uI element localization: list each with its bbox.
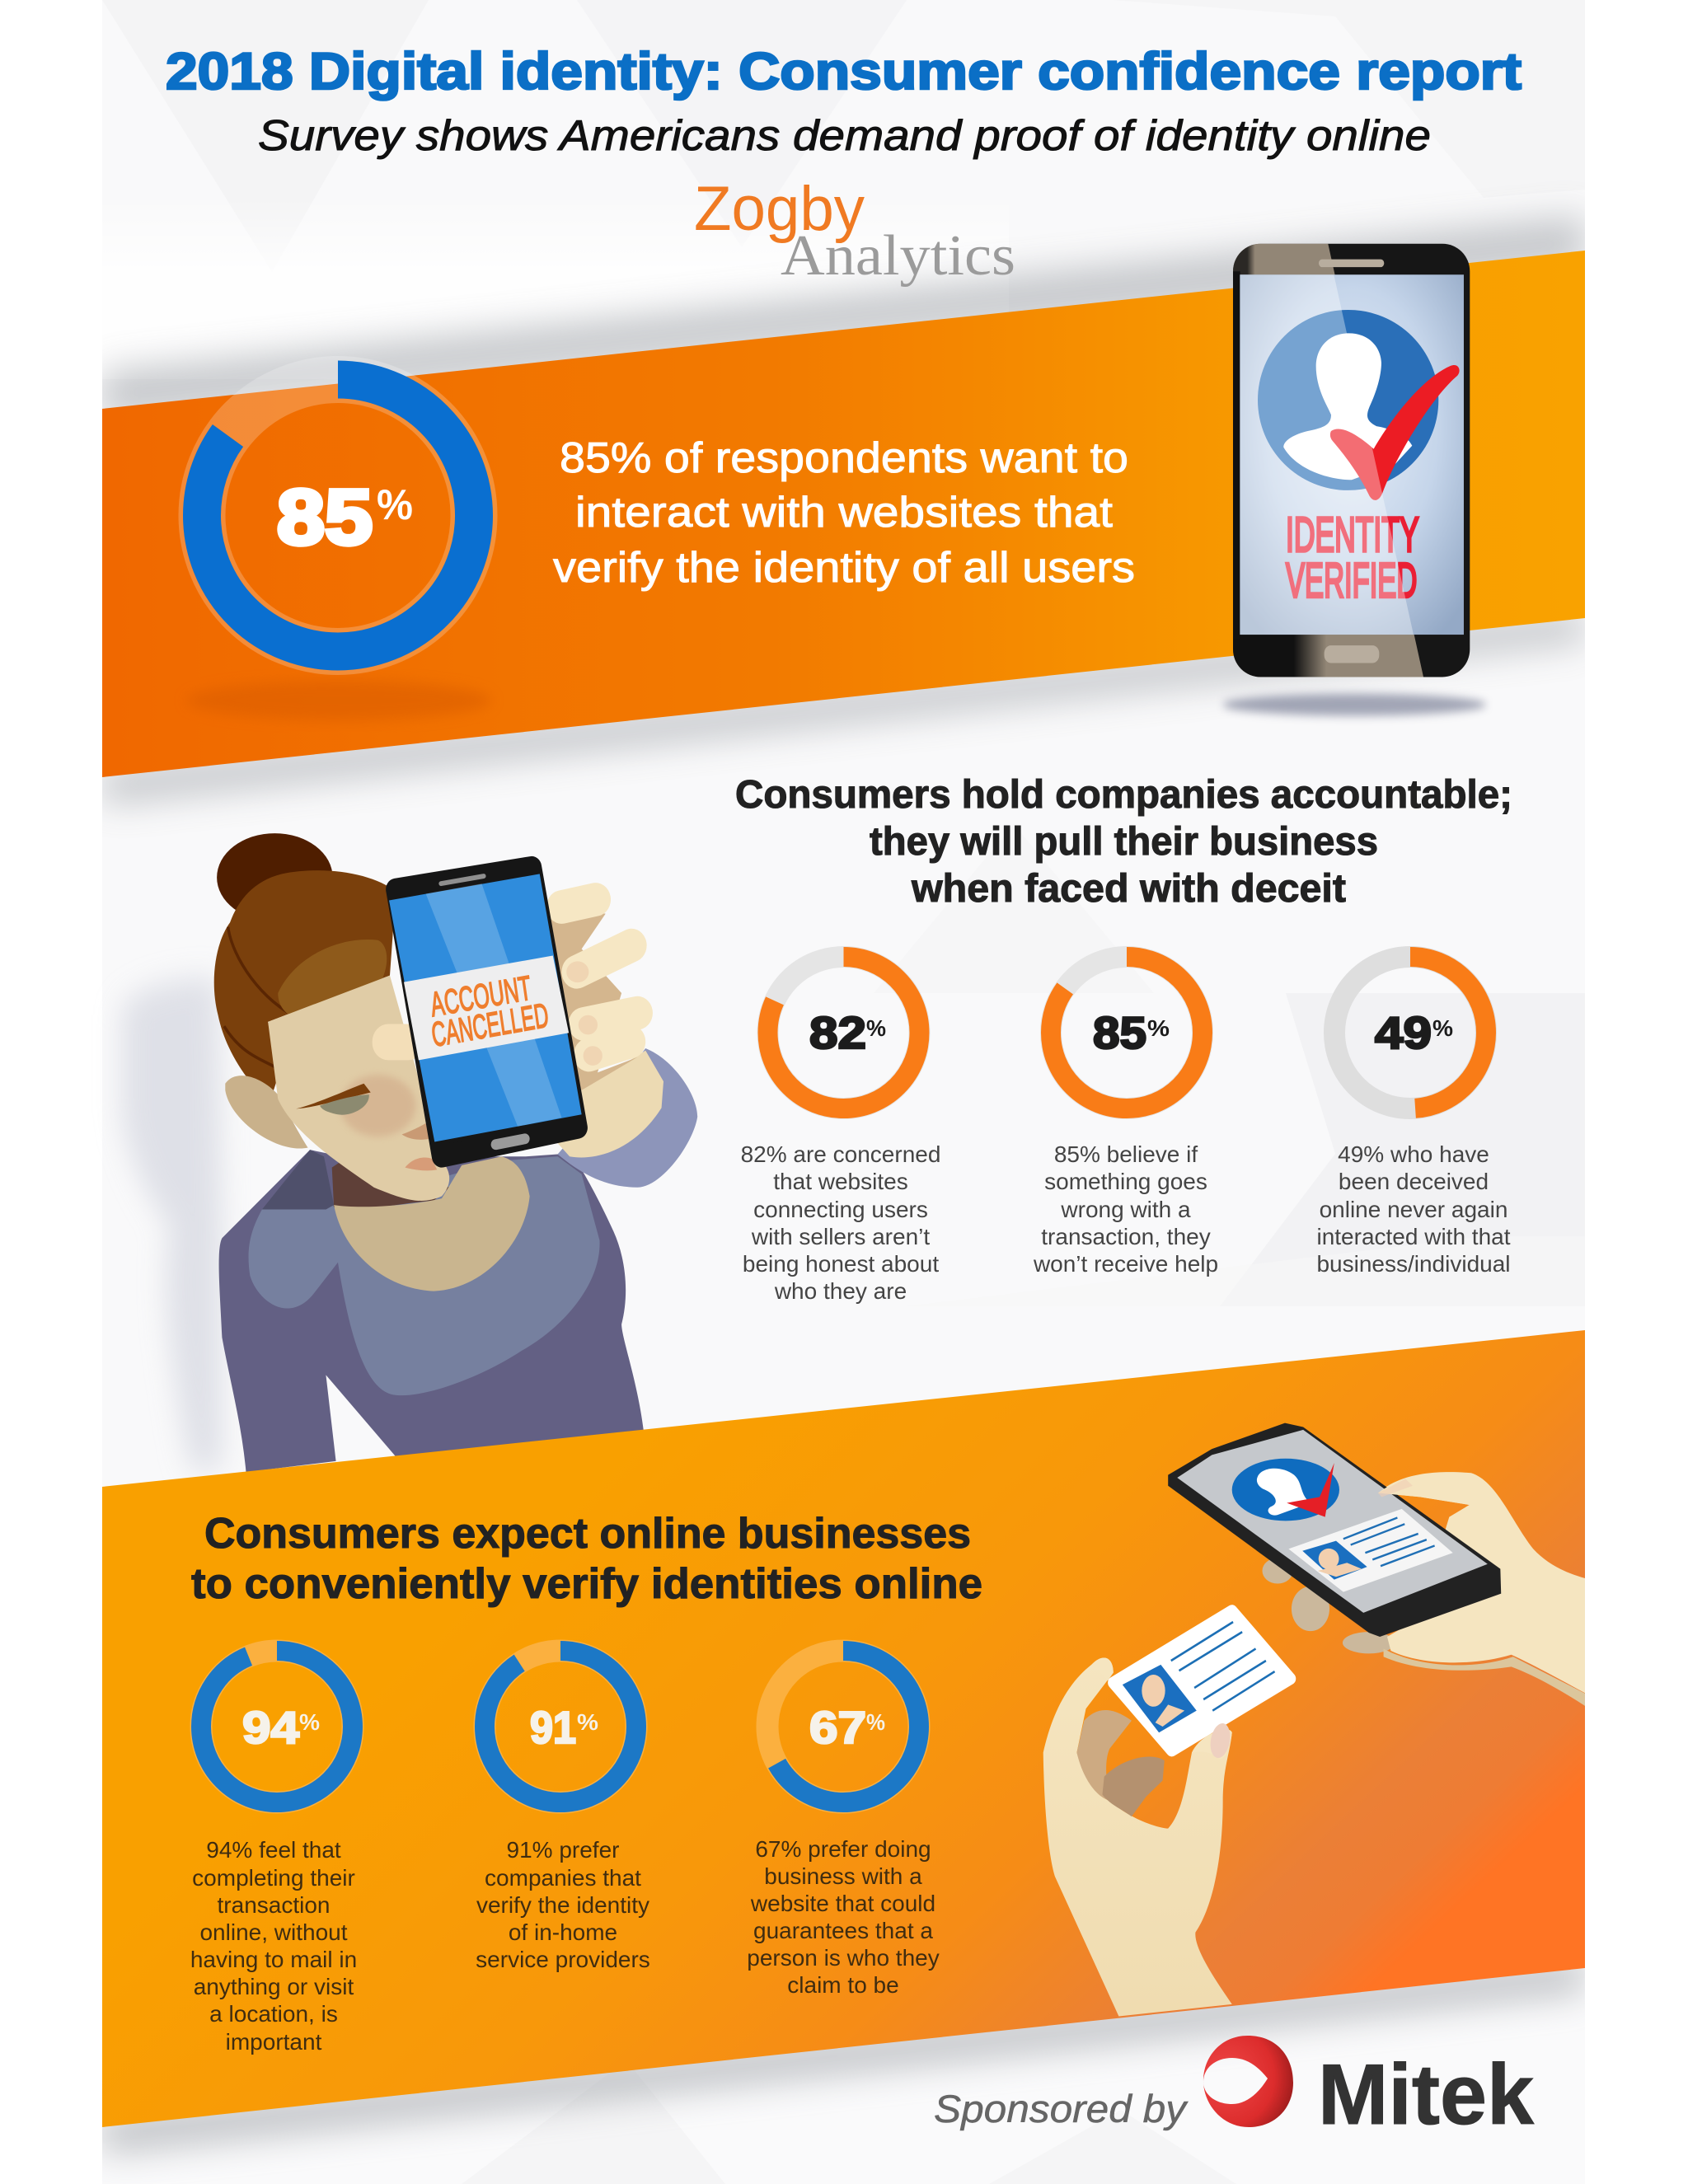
caption: 85%: transaction, they xyxy=(1041,1224,1211,1249)
caption: 94%: important xyxy=(226,2029,322,2055)
illustration: woman with phone xyxy=(122,833,697,1472)
donut chart: 94%: % xyxy=(299,1709,320,1735)
caption: 85%: 85% believe if xyxy=(1054,1141,1198,1167)
caption: 91% xyxy=(476,1837,650,1972)
icon: phone identity verified: IDENTITY xyxy=(1286,507,1419,562)
donut chart: 82%: % xyxy=(866,1015,886,1041)
caption: 82%: with sellers aren’t xyxy=(751,1224,930,1249)
caption: 94% xyxy=(190,1837,357,2055)
text block: 85% of respondents xyxy=(553,434,1135,592)
caption: 91%: service providers xyxy=(476,1947,650,1972)
caption: 67% xyxy=(747,1836,940,1998)
panel: orange band convenient verification xyxy=(102,1330,1585,2127)
donut chart: 85%: 85 xyxy=(1093,1007,1146,1058)
icon: phone identity verified: VERIFIED xyxy=(1286,553,1417,608)
caption: 85%: something goes xyxy=(1044,1169,1207,1194)
caption: 49% xyxy=(1316,1141,1511,1277)
donut chart: 67%: 67 xyxy=(809,1702,866,1753)
caption: 67%: person is who they xyxy=(747,1945,940,1971)
caption: 94%: 94% feel that xyxy=(206,1837,341,1863)
caption: 49%: interacted with that xyxy=(1316,1224,1511,1249)
donut chart: 49% xyxy=(1334,957,1486,1108)
caption: 82%: that websites xyxy=(773,1169,908,1194)
caption: 91%: of in-home xyxy=(509,1919,617,1945)
heading: consumers hold companies accountable xyxy=(735,773,1512,911)
donut chart: 91%: % xyxy=(577,1709,598,1735)
heading: consumers hold companies accountable: when faced with deceit xyxy=(911,867,1346,911)
donut chart: 91%: 91 xyxy=(530,1702,576,1753)
caption: 49%: 49% who have xyxy=(1338,1141,1489,1167)
heading: consumers hold companies accountable: Consumers hold companies accountable; xyxy=(735,773,1512,817)
sponsor label: Sponsored by xyxy=(934,2087,1189,2130)
donut chart: 94% xyxy=(201,1651,353,1802)
text block: 85% of respondents: verify the identity of all users xyxy=(553,544,1135,592)
donut chart: 49%: % xyxy=(1432,1015,1453,1041)
caption: 82% xyxy=(741,1141,940,1304)
title: 2018 Digital identity: Consumer confidence report xyxy=(166,43,1522,101)
heading: consumers expect online businesses: to conveniently verify identities online xyxy=(191,1560,982,1608)
donut chart: 85% xyxy=(186,379,491,720)
logo: Mitek: Mitek xyxy=(1318,2047,1534,2143)
icon: phone identity verified xyxy=(1222,239,1486,715)
logo: Mitek xyxy=(1203,2036,1534,2143)
panel: orange band 85% xyxy=(102,251,1585,777)
caption: 82%: 82% are concerned xyxy=(741,1141,940,1167)
donut chart: 91% xyxy=(485,1651,636,1802)
donut chart: 85%: % xyxy=(1147,1015,1170,1041)
caption: 82%: connecting users xyxy=(753,1197,928,1222)
donut chart: 82%: 82 xyxy=(809,1007,866,1058)
text block: 85% of respondents: interact with websites that xyxy=(575,489,1114,537)
caption: 82%: who they are xyxy=(774,1278,907,1304)
caption: 49%: been deceived xyxy=(1339,1169,1489,1194)
caption: 85% xyxy=(1033,1141,1218,1277)
caption: 94%: online, without xyxy=(199,1919,348,1945)
donut chart: 85% xyxy=(1051,957,1203,1108)
logo: Zogby Analytics xyxy=(694,174,1015,288)
caption: 67%: business with a xyxy=(764,1863,922,1889)
heading: consumers hold companies accountable: they will pull their business xyxy=(870,820,1378,864)
logo: Zogby Analytics: Analytics xyxy=(781,224,1015,288)
subtitle: Survey shows Americans demand proof of identity online xyxy=(258,112,1431,160)
logo: Zogby Analytics: Zogby xyxy=(694,174,865,244)
caption: 94%: having to mail in xyxy=(190,1947,357,1972)
caption: 67%: website that could xyxy=(750,1891,935,1916)
donut chart: 94%: 94 xyxy=(242,1702,299,1753)
band shadows xyxy=(102,216,1585,2153)
caption: 94%: completing their xyxy=(192,1865,355,1891)
donut chart: 67%: % xyxy=(866,1709,885,1735)
illustration: woman with phone: ACCOUNT xyxy=(428,969,533,1024)
caption: 85%: won’t receive help xyxy=(1033,1251,1218,1277)
caption: 49%: online never again xyxy=(1320,1197,1507,1222)
caption: 67%: guarantees that a xyxy=(753,1918,933,1943)
caption: 49%: business/individual xyxy=(1316,1251,1511,1277)
caption: 91%: 91% prefer xyxy=(507,1837,619,1863)
donut chart: 49%: 49 xyxy=(1375,1007,1432,1058)
caption: 67%: claim to be xyxy=(787,1972,899,1998)
caption: 91%: verify the identity xyxy=(476,1892,649,1918)
caption: 67%: 67% prefer doing xyxy=(755,1836,931,1862)
caption: 85%: wrong with a xyxy=(1060,1197,1191,1222)
heading: consumers expect online businesses xyxy=(191,1510,982,1608)
donut chart: 85%: 85 xyxy=(277,474,373,561)
donut chart: 82% xyxy=(768,957,920,1108)
illustration: woman with phone: CANCELLED xyxy=(429,996,551,1054)
caption: 94%: anything or visit xyxy=(194,1974,354,1999)
donut chart: 85%: % xyxy=(377,481,413,529)
heading: consumers expect online businesses: Consumers expect online businesses xyxy=(204,1510,971,1558)
caption: 91%: companies that xyxy=(485,1865,641,1891)
text block: 85% of respondents: 85% of respondents want to xyxy=(560,434,1128,482)
caption: 82%: being honest about xyxy=(743,1251,939,1277)
illustration: hands with phone and ID card xyxy=(1043,1423,1596,2016)
caption: 94%: a location, is xyxy=(209,2001,338,2027)
caption: 94%: transaction xyxy=(218,1892,330,1918)
donut chart: 67% xyxy=(767,1651,919,1802)
